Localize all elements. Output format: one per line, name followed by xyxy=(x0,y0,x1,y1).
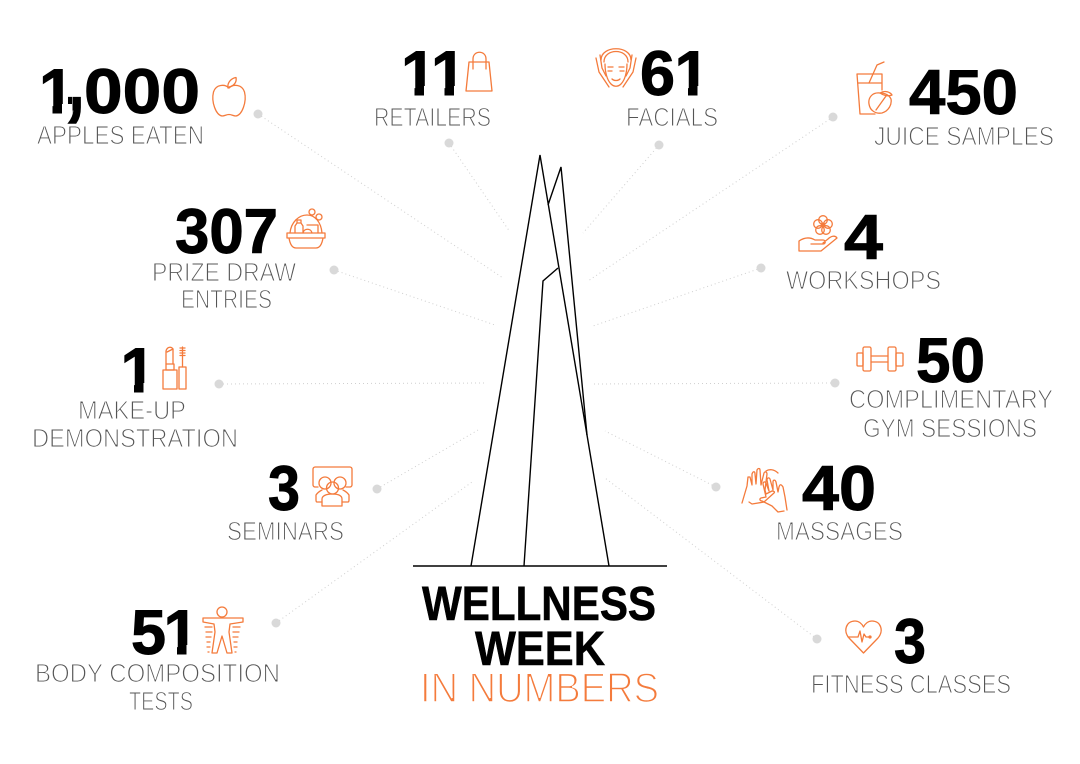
stat: workshops: WORKSHOPS xyxy=(786,267,941,295)
stat: make-up demonstration: 1 xyxy=(120,336,156,406)
stat: fitness classes: FITNESS CLASSES xyxy=(811,671,1011,699)
stat: massages: MASSAGES xyxy=(776,518,903,546)
stat: body composition tests: BODY COMPOSITION xyxy=(35,660,280,688)
stat: prize draw entries xyxy=(152,197,325,314)
stat: retailers: RETAILERS xyxy=(374,104,491,132)
stat: body composition tests: TESTS xyxy=(129,688,193,716)
stat: juice samples xyxy=(857,58,1054,151)
stat: juice samples: JUICE SAMPLES xyxy=(874,123,1054,151)
stat: workshops: 4 xyxy=(844,203,883,273)
stat: make-up demonstration: DEMONSTRATION xyxy=(32,425,238,453)
stat: body composition tests xyxy=(37,606,278,710)
stat: prize draw entries: ENTRIES xyxy=(181,286,272,314)
stat: complimentary gym sessions xyxy=(849,326,1053,443)
stat: facials: 1 xyxy=(674,39,710,109)
icon: lipstick and mascara xyxy=(163,347,186,389)
title: WELLNESS xyxy=(422,578,656,631)
stat: facials: 6 xyxy=(640,39,675,109)
stat: apples eaten: 1 xyxy=(39,57,74,127)
stat: apples eaten: APPLES EATEN xyxy=(37,122,204,150)
title: IN NUMBERS xyxy=(420,664,659,711)
icon: body scan figure xyxy=(203,607,243,653)
stat: complimentary gym sessions: 50 xyxy=(916,326,985,396)
stat: make-up demonstration xyxy=(34,346,236,447)
stat: retailers: 1 xyxy=(401,39,436,109)
icon: heart with pulse xyxy=(846,621,881,653)
title: WEEK xyxy=(475,623,605,676)
stat: juice samples: 450 xyxy=(909,58,1018,128)
icon: face with hands xyxy=(596,49,636,87)
stat: seminars: SEMINARS xyxy=(227,518,344,546)
stat: massages: 40 xyxy=(802,454,876,524)
stat: apples eaten: 000 xyxy=(84,57,200,127)
stat: massages xyxy=(742,454,903,546)
stat: facials: FACIALS xyxy=(626,104,718,132)
stat: workshops xyxy=(786,203,941,295)
stat: apples eaten xyxy=(38,68,246,144)
stat: fitness classes xyxy=(811,607,1011,699)
stat: fitness classes: 3 xyxy=(894,607,926,677)
stat: body composition tests: 1 xyxy=(164,598,199,668)
stat: prize draw entries: 307 xyxy=(175,197,278,267)
icon: shopping bag xyxy=(466,52,492,91)
icon: audience and screen xyxy=(313,467,352,506)
stat: seminars: 3 xyxy=(268,454,300,524)
stat: retailers xyxy=(376,51,493,126)
stat: retailers: 1 xyxy=(431,39,466,109)
icon: juice glass and peach xyxy=(857,62,892,114)
stat: body composition tests: 5 xyxy=(131,598,166,668)
icon: massaging hands xyxy=(742,468,787,512)
shard building illustration xyxy=(413,155,667,566)
stat: facials xyxy=(595,48,717,126)
connector lines and dots xyxy=(214,110,840,644)
stat: complimentary gym sessions: COMPLIMENTARY xyxy=(849,386,1053,414)
stat: apples eaten: , xyxy=(62,34,86,129)
title xyxy=(420,578,659,711)
stat: prize draw entries: PRIZE DRAW xyxy=(152,259,296,287)
stat: make-up demonstration: MAKE-UP xyxy=(78,397,186,425)
icon: apple xyxy=(213,78,245,116)
icon: dumbbell xyxy=(857,347,903,371)
icon: gift basket xyxy=(287,209,325,248)
stat: complimentary gym sessions: GYM SESSIONS xyxy=(863,415,1037,443)
stat: seminars xyxy=(227,454,352,546)
icon: hand holding flower xyxy=(799,216,837,251)
